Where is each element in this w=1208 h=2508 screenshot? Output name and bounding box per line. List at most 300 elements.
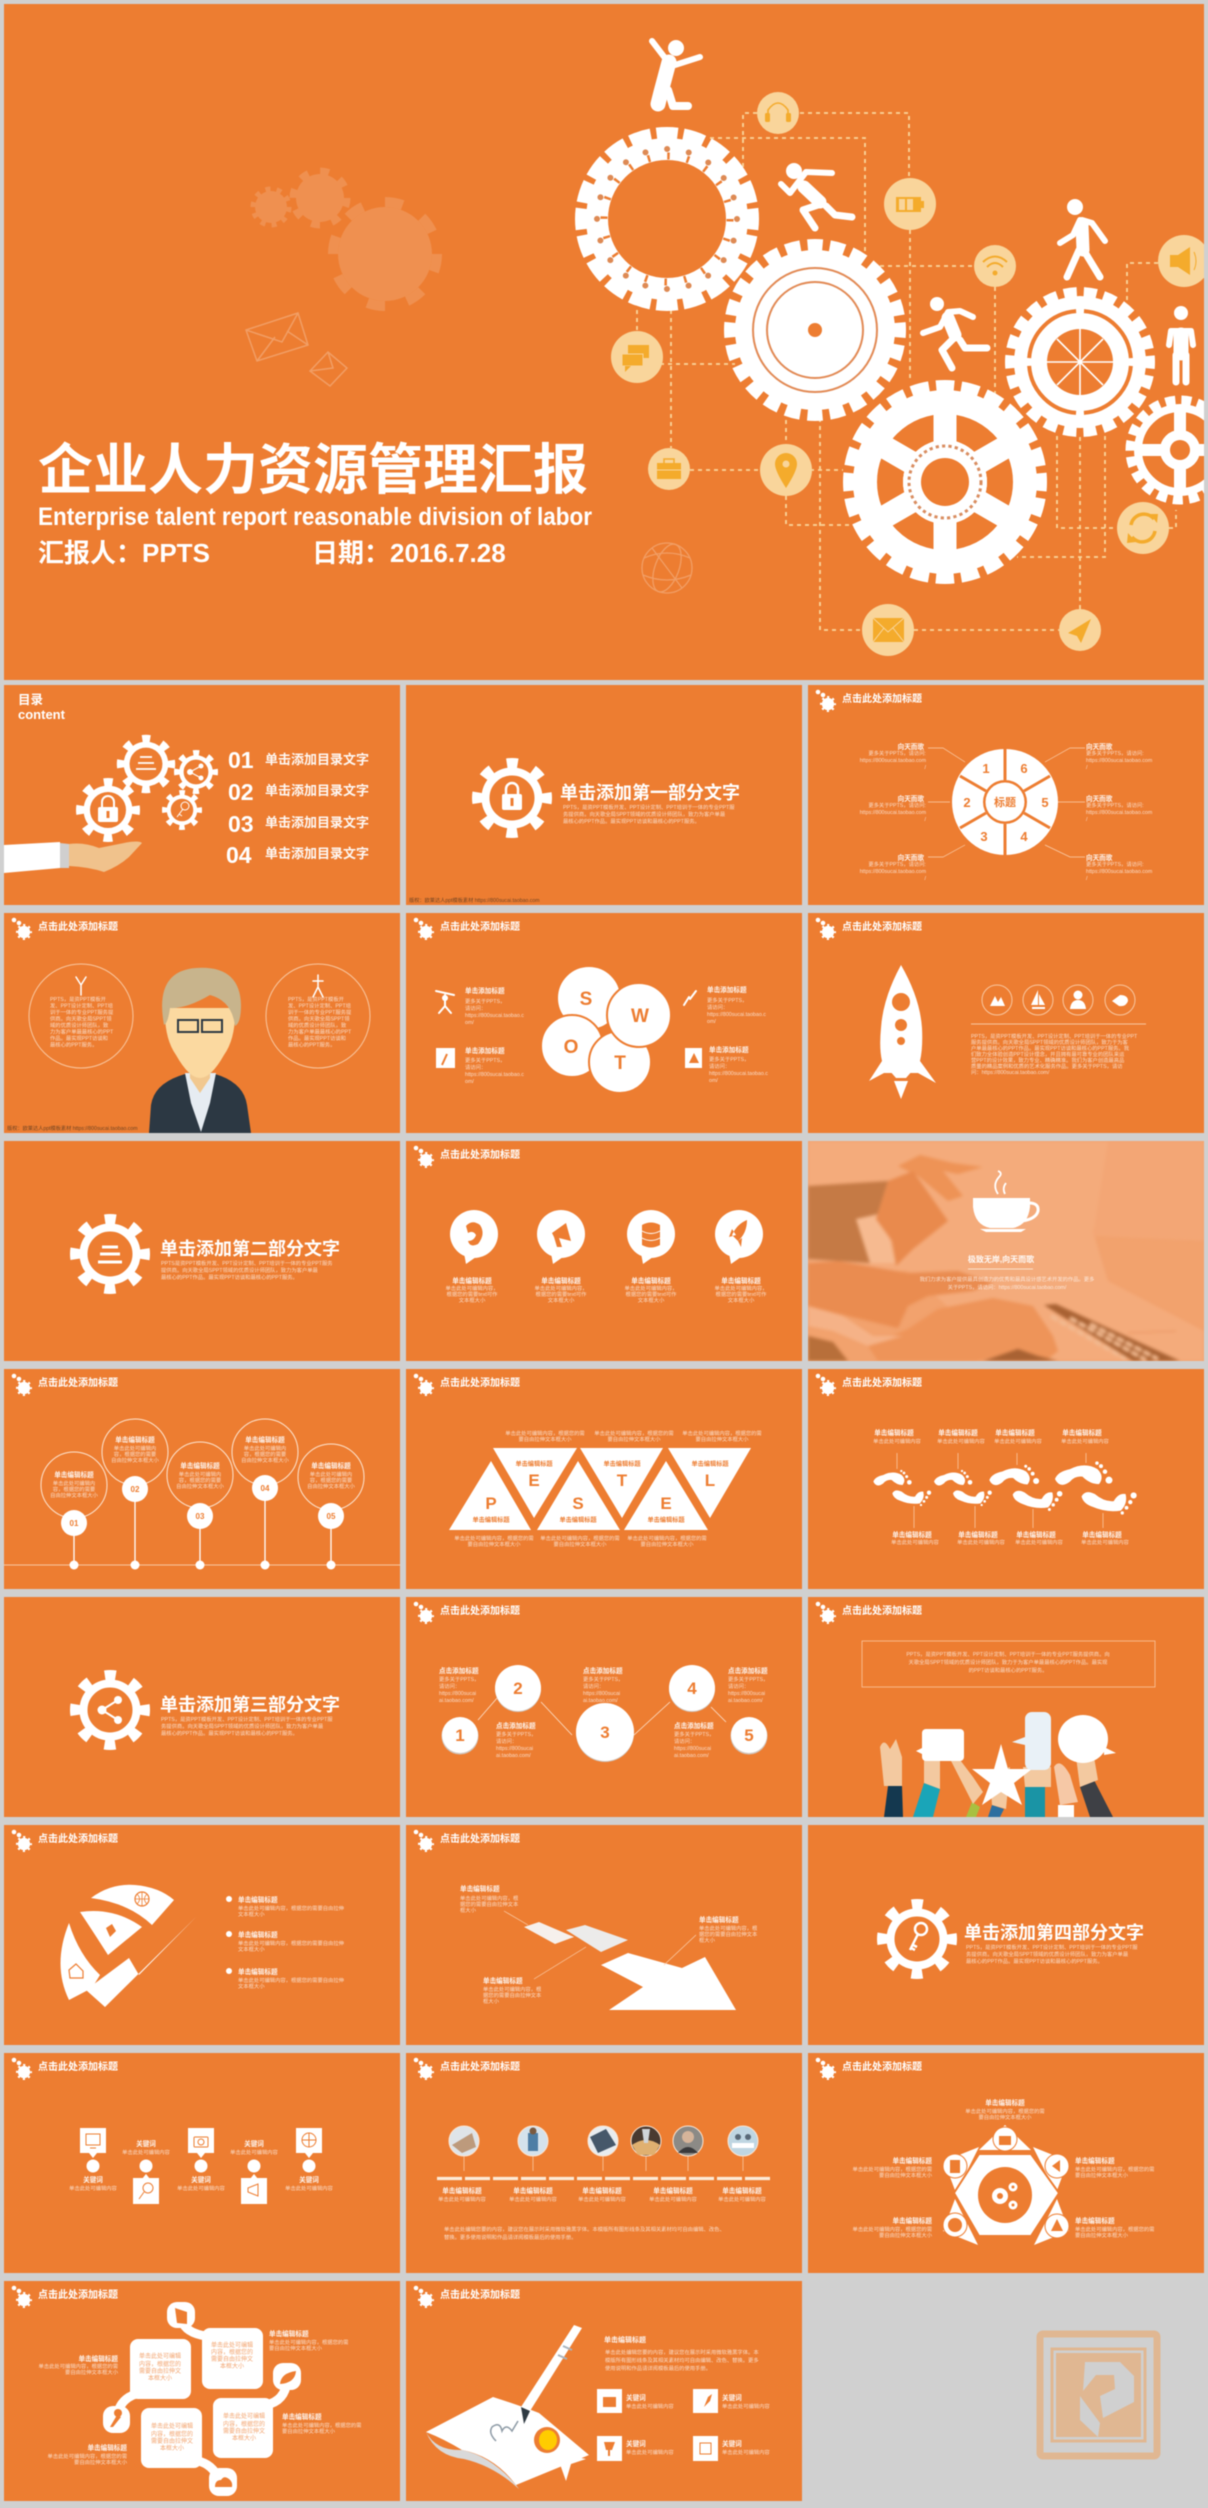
text block: 营PPT的设计效果，致力专业、精确精准。我们为客户创造最高品: [971, 1056, 1124, 1064]
labels: 更多关于PPTS，: [496, 1730, 536, 1738]
keyword cards: 关键词: [722, 2393, 742, 2402]
block texts: 需要自由拉伸文: [223, 2427, 265, 2435]
triangles: T: [617, 1471, 628, 1490]
panel: arrow: [406, 1825, 802, 2045]
icon: chat: [611, 331, 663, 383]
list: 单击添加目录文字: [265, 815, 369, 830]
left labels: 单击添加标题: [465, 1046, 505, 1055]
sub heading: content: [18, 707, 66, 722]
labels: 单击编辑标题: [1075, 2216, 1115, 2225]
text block: [563, 803, 735, 825]
figure: standing person: [1169, 306, 1193, 382]
keyword cards: [597, 2389, 770, 2461]
bottom labels: 单击此处可编辑内容: [957, 1538, 1006, 1546]
text block: [971, 1032, 1138, 1076]
left circle text: 发、PPT设计定制、PPT培: [50, 1002, 114, 1010]
outline circles with text: 容，根据您的需要: [310, 1476, 352, 1484]
block texts: 需要自由拉伸文: [151, 2437, 193, 2445]
triangles: 单击编辑标题: [691, 1460, 729, 1468]
right circle text: 供商。向天歌全局SPPT领: [288, 1014, 350, 1022]
labels: 单击编辑标题: [442, 2186, 482, 2195]
footprints: [873, 1461, 1137, 1515]
text block: [605, 2348, 759, 2372]
labels: [39, 2329, 361, 2466]
outline circles with text: 单击编辑标题: [180, 1461, 220, 1470]
milestones: 05: [327, 1512, 336, 1521]
captions: 单击此处可编辑内容，: [715, 1284, 767, 1292]
bullet list: 单击编辑标题: [238, 1930, 278, 1939]
panel: raised hands: [808, 1597, 1204, 1817]
date: 日期：2016.7.28: [312, 538, 506, 568]
bottom labels: [891, 1530, 1130, 1546]
connectors: [928, 748, 1085, 857]
list: [226, 747, 369, 868]
block texts: 单击此处可编辑: [151, 2422, 193, 2430]
bottom labels: 单击此处可编辑内容: [891, 1538, 940, 1546]
triangles: 单击编辑标题: [647, 1516, 685, 1524]
heading: 单击添加第三部分文字: [160, 1694, 340, 1715]
keyword cards: 关键词: [722, 2439, 742, 2448]
labels: 单击此处可编辑内容，根据您的需: [965, 2107, 1045, 2115]
right labels: 更多关于PPTS，请访问:: [1086, 749, 1144, 757]
labels: 更多关于PPTS，: [439, 1675, 479, 1683]
right circle text: [266, 964, 370, 1068]
left labels: https://800sucai.taobao.com: [860, 758, 927, 764]
captions: 单击编辑标题: [452, 1276, 492, 1285]
faint envelopes: [246, 313, 347, 386]
text block: 最核心的PPT作品。最实现PPT访谈和最核心的PPT服务。: [161, 1273, 298, 1281]
keyword labels: 关键词: [244, 2139, 264, 2148]
right labels: 单击添加标题: [707, 985, 747, 994]
labels: 单击编辑标题: [87, 2443, 127, 2452]
block texts: 需要自由拉伸文: [139, 2367, 181, 2375]
petal wheel: 3: [980, 829, 988, 844]
triangles: S: [572, 1494, 584, 1513]
photo thumbnails: [449, 2126, 758, 2156]
SWOT petals: W: [631, 1006, 649, 1027]
left labels: 更多关于PPTS，请访问:: [868, 749, 926, 757]
outline circles with text: [41, 1419, 364, 1518]
numbered circles: 3: [600, 1723, 610, 1742]
icon: paper plane: [1059, 609, 1101, 651]
labels: 要自由拉伸文本框大小: [74, 2458, 128, 2466]
figure: runner top: [781, 163, 852, 228]
segmented check graphic: [60, 1885, 196, 2007]
block texts: 内容，根据您的: [223, 2420, 265, 2428]
bottom captions: 单击此处可编辑内容，根据您的需: [540, 1534, 620, 1542]
top labels: 单击此处可编辑内容: [1061, 1437, 1110, 1445]
captions: 单击此处可编辑内容，: [625, 1284, 677, 1292]
text block: 服务提供商。向天歌全局SPPT领域的优质设计师团队，致力于为客: [971, 1038, 1129, 1046]
list: 单击添加目录文字: [265, 846, 369, 861]
keyword labels: 单击此处可编辑内容: [177, 2184, 226, 2192]
header: 点击此处添加标题: [440, 920, 520, 933]
left labels: 更多关于PPTS，请访问:: [868, 801, 926, 809]
captions: 单击此处可编辑内容，: [446, 1284, 498, 1292]
left circle text: 训于一体的专业PPT服务提: [50, 1008, 114, 1016]
left circle text: 作品。最实现PPT访谈和: [50, 1034, 108, 1042]
labels: 单击编辑标题: [892, 2216, 932, 2225]
bullet list: 单击编辑标题: [238, 1895, 278, 1904]
top labels: 单击编辑标题: [1062, 1428, 1102, 1437]
header: [816, 690, 922, 711]
labels: ai.taobao.com/: [728, 1698, 763, 1704]
keyword cards: 关键词: [626, 2393, 646, 2402]
text block: PPTS，是资PPT模板开发、PPT设计定制、PPT培训于一体的专业PPT服: [563, 803, 735, 811]
keyword labels: 单击此处可编辑内容: [230, 2148, 279, 2156]
captions: 单击此处可编辑内容，: [535, 1284, 587, 1292]
title: 企业人力资源管理汇报: [38, 439, 588, 501]
keyword cards: 单击此处可编辑内容: [626, 2402, 674, 2410]
left labels: 向天而歌: [898, 853, 924, 862]
labels: 单击编辑标题: [582, 2186, 622, 2195]
captions: 单击编辑标题: [721, 1276, 761, 1285]
left labels: [860, 742, 927, 882]
keyword cards: 单击此处可编辑内容: [722, 2448, 770, 2456]
panel: circle timeline: [4, 1369, 400, 1589]
outline circles with text: 单击此处可编辑内: [310, 1470, 352, 1478]
zigzag arrow: [524, 1922, 736, 2010]
captions: 单击编辑标题: [631, 1276, 671, 1285]
footer note: 版权：欧莱达人ppt模板素材 https://800sucai.taobao.com: [7, 1124, 138, 1132]
right labels: https://800sucai.taobao.com: [1086, 758, 1153, 764]
watermark logo: [1040, 2334, 1157, 2456]
block texts: 本框大小: [232, 2434, 256, 2442]
labels: 单击编辑标题: [483, 1976, 523, 1985]
outline circles with text: 单击编辑标题: [54, 1470, 94, 1479]
header: 点击此处添加标题: [38, 1832, 118, 1845]
left labels: /: [925, 765, 927, 771]
left labels: https://800sucai.taobao.com: [860, 810, 927, 816]
triangles: 单击编辑标题: [472, 1516, 510, 1524]
right labels: om/: [709, 1078, 718, 1084]
text block: PPTS是资PPT模板开发、PPT设计定制、PPT培训于一体的专业PPT服务: [161, 1259, 333, 1267]
labels: https://800sucai: [728, 1691, 765, 1697]
right labels: https://800sucai.taobao.c: [707, 1012, 766, 1018]
left circle text: PPTS，是资PPT模板开: [50, 995, 107, 1003]
illustration: raised hands: [880, 1712, 1116, 1817]
header: 点击此处添加标题: [440, 1832, 520, 1845]
list: 04: [226, 842, 252, 868]
labels: 单击此处可编辑内容，根: [483, 1985, 542, 1993]
labels: 框大小: [483, 1997, 500, 2005]
panel: section four: [808, 1825, 1204, 2045]
labels: 要自由拉伸文本框大小: [1075, 2171, 1129, 2179]
icon: location pin: [760, 444, 812, 496]
icon: hand with sleeve: [4, 842, 142, 873]
icon: gear stack: [80, 738, 215, 838]
text block: 们致力全体验创造PPT设计理念，并且拥有最可靠专业的团队来运: [971, 1050, 1125, 1058]
header: 点击此处添加标题: [38, 920, 118, 933]
captions: 文本框大小: [638, 1296, 665, 1304]
labels: 要自由拉伸文本框大小: [269, 2344, 323, 2352]
leader lines: [464, 2156, 743, 2171]
labels: 单击编辑标题: [282, 2412, 322, 2421]
keyword labels: 关键词: [191, 2175, 211, 2184]
divider line: [968, 1268, 1033, 1270]
illustration: rocket: [869, 965, 936, 1099]
header: [12, 1830, 118, 1851]
panel: contents slide: [4, 685, 400, 905]
labels: 单击此处可编辑内容，根据您的需: [39, 2362, 118, 2370]
leader lines: [897, 1453, 1103, 1528]
outline circles with text: 自由拉伸文本框大小: [307, 1482, 356, 1490]
left labels: 请访问：: [465, 1063, 486, 1071]
labels: 单击编辑标题: [699, 1915, 739, 1924]
header: 点击此处添加标题: [38, 2288, 118, 2301]
labels: 单击编辑标题: [513, 2186, 553, 2195]
labels: 更多关于PPTS，: [728, 1675, 768, 1683]
header: [816, 1374, 922, 1395]
header: 点击此处添加标题: [440, 1148, 520, 1161]
text block: 提供商。向天歌全局SPPT领域的优质设计师团队，致力为客户单最: [161, 1266, 319, 1274]
header: 点击此处添加标题: [842, 920, 922, 933]
outline circles with text: 单击此处可编辑内: [53, 1479, 95, 1487]
text block: 务提供商。向天歌全局SPPT领域的优质设计师团队，致力为客户单最: [966, 1950, 1129, 1958]
keyword cards: 单击此处可编辑内容: [626, 2448, 674, 2456]
faint globe: [642, 540, 692, 596]
squares and nodes: [80, 2128, 322, 2204]
captions: 根据您的需要text可作: [447, 1290, 498, 1298]
labels: 据您的需要自由拉伸文本: [483, 1991, 542, 1999]
block texts: 单击此处可编辑: [223, 2412, 265, 2420]
panel: SWOT: [406, 913, 802, 1133]
top captions: [505, 1429, 762, 1443]
panel: photo timeline: [406, 2053, 802, 2273]
labels: 更多关于PPTS，: [583, 1675, 623, 1683]
icon: key gear: [882, 1904, 952, 1974]
paragraph: 单击此处编辑您要的内容，建议您在展示时采用微软雅黑字体。本模版所有图形线条及其相关素材均可自由编辑、改色、: [444, 2225, 725, 2233]
labels: [853, 2098, 1154, 2239]
left labels: 单击添加标题: [465, 986, 505, 995]
right labels: 更多关于PPTS，请访问:: [1086, 860, 1144, 868]
header: 点击此处添加标题: [842, 2060, 922, 2073]
triangles: 单击编辑标题: [559, 1516, 597, 1524]
labels: 单击编辑标题: [78, 2354, 118, 2363]
labels: https://800sucai: [674, 1746, 711, 1752]
outline circles with text: 容，根据您的需要: [179, 1476, 221, 1484]
captions: 根据您的需要text可作: [716, 1290, 767, 1298]
right labels: /: [1086, 876, 1088, 882]
right labels: https://800sucai.taobao.com: [1086, 810, 1153, 816]
labels: 单击此处可编辑内容: [509, 2195, 558, 2203]
labels: ai.taobao.com/: [674, 1753, 709, 1759]
labels: 单击此处可编辑内容: [718, 2195, 767, 2203]
left circle text: 力为客户单最最核心的PPT: [50, 1028, 114, 1036]
left labels: [465, 986, 524, 1085]
icon: battery: [884, 178, 936, 230]
labels: 单击此处可编辑内容: [438, 2195, 487, 2203]
text block: 务提供商。向天歌全局SPPT领域的优质设计师团队，致力为客户单最: [563, 810, 726, 818]
right labels: [707, 985, 768, 1084]
panel: section one: [406, 685, 802, 905]
captions: 根据您的需要text可作: [626, 1290, 677, 1298]
left circle text: [29, 964, 133, 1068]
icons: [436, 991, 702, 1068]
figure: walking person: [1060, 199, 1105, 277]
bottom labels: 单击编辑标题: [892, 1530, 932, 1539]
text block: PPTS，是资PPT模板开发、PPT设计定制、PPT培训于一体的专业PPT服: [966, 1943, 1138, 1951]
labels: 单击此处可编辑内容，根据您的需: [853, 2225, 932, 2233]
right labels: 更多关于PPTS，请访问:: [1086, 801, 1144, 809]
milestones: 01: [70, 1519, 79, 1528]
text block: 使用说明和作品请详阅模板最后的使用手册。: [605, 2364, 711, 2372]
keyword labels: 关键词: [136, 2139, 156, 2148]
subtitle: Enterprise talent report reasonable division of labor: [38, 503, 592, 531]
text box: PPTS，是资PPT模板开发、PPT设计定制、PPT培训于一体的专业PPT服务提供商。向: [906, 1650, 1110, 1658]
outline circles with text: 单击此处可编辑内: [179, 1470, 221, 1478]
illustration: businessman: [149, 968, 251, 1133]
labels: 请访问：: [728, 1682, 749, 1690]
faint background gears: [253, 171, 437, 306]
captions: [446, 1276, 767, 1304]
header: [12, 2058, 118, 2079]
keyword labels: 关键词: [299, 2175, 319, 2184]
star hexagon: [943, 2125, 1069, 2245]
keyword labels: 单击此处可编辑内容: [69, 2184, 118, 2192]
right circle text: 最核心的PPT服务。: [288, 1040, 335, 1048]
list: 02: [228, 779, 254, 805]
bullet list: 单击此处可编辑内容，根据您的需要自由拉伸: [238, 1976, 344, 1984]
text block: 质量的精品案例和优质的艺术化服务作品。更多关于PPTS，请访: [971, 1062, 1123, 1070]
numbered circles: 2: [513, 1679, 523, 1698]
text block: 问：https://800sucai.taobao.com/: [971, 1068, 1050, 1076]
top labels: 单击此处可编辑内容: [937, 1437, 986, 1445]
labels: 请访问：: [583, 1682, 604, 1690]
header: 点击此处添加标题: [842, 692, 922, 705]
petal wheel: 1: [982, 761, 990, 776]
list: 单击添加目录文字: [265, 752, 369, 767]
connectors: [478, 1697, 726, 1735]
right circle text: 力为客户单最最核心的PPT: [288, 1028, 352, 1036]
bottom captions: 要自由拉伸文本框大小: [468, 1540, 521, 1548]
panel: check pie: [4, 1825, 400, 2045]
heading: 单击编辑标题: [604, 2335, 646, 2344]
petal wheel: 5: [1041, 795, 1049, 810]
header: [816, 918, 922, 939]
outline circles with text: 容，根据您的需要: [114, 1450, 156, 1458]
figure: jumping person: [652, 40, 700, 106]
bottom labels: 单击此处可编辑内容: [1081, 1538, 1130, 1546]
footer note: 版权：欧莱达人ppt模板素材 https://800sucai.taobao.com: [409, 896, 540, 904]
right labels: /: [1086, 817, 1088, 823]
labels: 点击添加标题: [728, 1666, 768, 1675]
labels: 单击编辑标题: [269, 2329, 309, 2338]
panel: five circles: [406, 1597, 802, 1817]
icon: refresh: [1117, 502, 1169, 554]
right labels: https://800sucai.taobao.c: [709, 1071, 768, 1077]
triangles: 单击编辑标题: [603, 1460, 641, 1468]
labels: 框大小: [699, 1936, 716, 1944]
bottom labels: 单击编辑标题: [958, 1530, 998, 1539]
caption: 极致无岸,向天而歌: [968, 1254, 1034, 1264]
block texts: 内容，根据您的: [211, 2348, 253, 2356]
text box: 的PPT访谈和最核心的PPT服务。: [969, 1666, 1047, 1674]
right circle text: 作品。最实现PPT访谈和: [288, 1034, 346, 1042]
left labels: 更多关于PPTS，: [465, 1056, 505, 1064]
panel: section two: [4, 1141, 400, 1361]
list: 01: [228, 747, 254, 773]
list: 03: [228, 811, 254, 837]
right circle text: PPTS，是资PPT模板开: [288, 995, 345, 1003]
text block: 模版所有图形线条及其相关素材均可自由编辑、改色、替换。更多: [605, 2356, 759, 2364]
labels: 要自由拉伸文本框大小: [282, 2427, 336, 2435]
captions: 文本框大小: [728, 1296, 755, 1304]
triangles: 单击编辑标题: [515, 1460, 553, 1468]
labels: 请访问：: [496, 1737, 517, 1745]
bullet list: 文本框大小: [238, 1910, 265, 1918]
panel: rocket: [808, 913, 1204, 1133]
icon: gear: [75, 1675, 145, 1745]
header: 点击此处添加标题: [440, 2288, 520, 2301]
right labels: [1086, 742, 1153, 882]
illustration: pen and paper: [426, 2325, 589, 2489]
labels: 单击编辑标题: [722, 2186, 762, 2195]
left labels: https://800sucai.taobao.c: [465, 1072, 524, 1078]
header: 点击此处添加标题: [38, 1376, 118, 1389]
left labels: /: [925, 876, 927, 882]
labels: 据您的需要自由拉伸文本: [460, 1900, 519, 1908]
icon: coffee cup: [973, 1171, 1038, 1232]
labels: https://800sucai: [583, 1691, 620, 1697]
outline circles with text: 自由拉伸文本框大小: [241, 1456, 290, 1464]
text block: [161, 1259, 333, 1281]
left labels: 向天而歌: [898, 794, 924, 803]
triangles: [449, 1448, 751, 1530]
header: [816, 1602, 922, 1623]
left circle text: 供商。向天歌全局SPPT领: [50, 1014, 112, 1022]
bottom captions: 要自由拉伸文本框大小: [641, 1540, 694, 1548]
text block: 我们力求为客户提供最具创造力的优秀和最具设计感艺术开发的作品。更多: [920, 1275, 1094, 1283]
text block: 单击此处编辑您要的内容，建议您在展示时采用微软雅黑字体。本: [605, 2348, 759, 2356]
figure: runner middle: [923, 297, 987, 368]
labels: [460, 1884, 758, 2005]
outline circles with text: 自由拉伸文本框大小: [111, 1456, 160, 1464]
icon circles: [982, 985, 1135, 1015]
text block: PPTS，是资PPT模板开发、PPT设计定制、PPT培训于一体的专业PPT服: [161, 1715, 333, 1723]
bullet list: 单击此处可编辑内容，根据您的需要自由拉伸: [238, 1939, 344, 1947]
keyword cards: 单击此处可编辑内容: [722, 2402, 770, 2410]
right labels: 请访问：: [707, 1003, 728, 1011]
panel: signature: [406, 2281, 802, 2501]
labels: https://800sucai: [439, 1691, 476, 1697]
gear 1: [582, 134, 752, 304]
outline circles with text: 自由拉伸文本框大小: [176, 1482, 225, 1490]
labels: [438, 2186, 767, 2203]
right labels: 向天而歌: [1086, 853, 1113, 862]
list: 单击添加目录文字: [265, 783, 369, 798]
right labels: 更多关于PPTS，: [707, 996, 747, 1004]
bottom captions: [454, 1534, 707, 1548]
outline circles with text: 单击编辑标题: [115, 1435, 155, 1444]
icon: wifi: [974, 245, 1016, 287]
triangles: E: [660, 1494, 672, 1513]
icon: envelope: [862, 604, 914, 656]
labels: 单击此处可编辑内容，根: [699, 1924, 758, 1932]
labels: [439, 1666, 768, 1759]
panel: person slide: [4, 913, 400, 1133]
labels: 单击此处可编辑内容，根据您的需: [1075, 2225, 1154, 2233]
bottom labels: 单击编辑标题: [1082, 1530, 1122, 1539]
panel: footprints: [808, 1369, 1204, 1589]
header: [12, 918, 118, 939]
text block: [161, 1715, 333, 1737]
labels: 点击添加标题: [674, 1721, 714, 1730]
top labels: 单击此处可编辑内容: [994, 1437, 1043, 1445]
icon: headphones: [757, 92, 799, 134]
petal wheel: 标题: [994, 795, 1016, 809]
labels: 单击此处可编辑内容，根据您的需: [853, 2165, 932, 2173]
